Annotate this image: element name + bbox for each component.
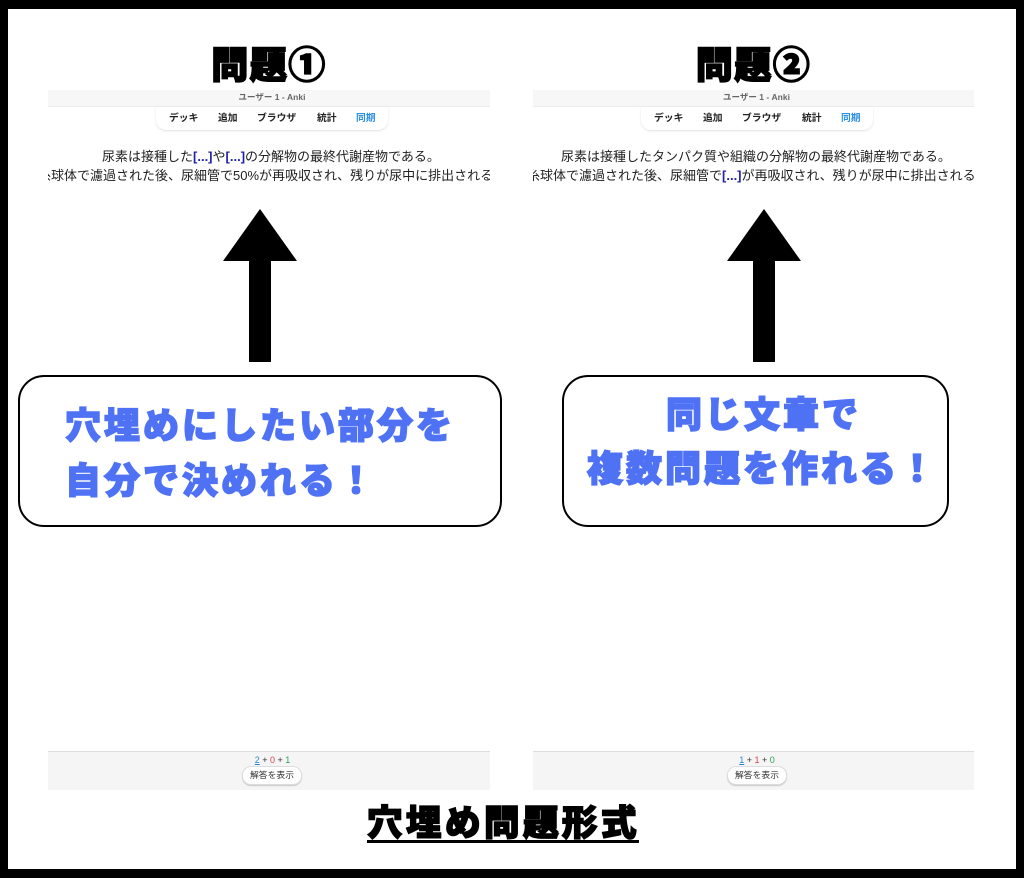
show answer button bbox=[242, 766, 302, 785]
icon: up arrow bbox=[727, 209, 801, 362]
heading: question 1: 問題① bbox=[211, 45, 327, 86]
app navigation menu: 同期 bbox=[841, 113, 861, 124]
app title bar bbox=[533, 90, 974, 107]
app navigation menu: ブラウザ bbox=[257, 113, 296, 124]
callout: choose blanks bbox=[18, 375, 502, 527]
app navigation menu: 同期 bbox=[356, 113, 376, 124]
callout text line 2: 自分で決めれる！ bbox=[65, 460, 377, 501]
panel: question 1 bbox=[18, 45, 502, 790]
show answer button bbox=[727, 766, 787, 785]
app navigation menu: 統計 bbox=[802, 113, 822, 124]
card counts: 1 + 1 + 0 bbox=[739, 755, 775, 765]
callout text line 1: 穴埋めにしたい部分を bbox=[65, 405, 455, 446]
panel: question 2 bbox=[533, 45, 974, 790]
app navigation menu: デッキ bbox=[654, 113, 683, 124]
app navigation menu: 追加 bbox=[218, 113, 238, 124]
app title bar bbox=[48, 90, 490, 107]
card text line 1: 尿素は接種したタンパク質や組織の分解物の最終代謝産物である。 bbox=[561, 149, 951, 164]
app navigation menu bbox=[156, 107, 388, 130]
app navigation menu bbox=[641, 107, 873, 130]
bottom title: 穴埋め問題形式 bbox=[367, 803, 640, 843]
app navigation menu: デッキ bbox=[169, 113, 198, 124]
card counts: 2 + 0 + 1 bbox=[255, 755, 290, 765]
show answer button: 解答を表示 bbox=[735, 770, 779, 780]
app footer with answer button bbox=[533, 751, 974, 790]
app title bar: ユーザー 1 - Anki bbox=[239, 92, 305, 102]
callout: multiple questions bbox=[562, 375, 949, 527]
show answer button: 解答を表示 bbox=[250, 770, 294, 780]
app footer with answer button bbox=[48, 751, 490, 790]
app title bar: ユーザー 1 - Anki bbox=[723, 92, 790, 102]
icon: up arrow bbox=[223, 209, 297, 362]
heading: question 2: 問題② bbox=[696, 45, 811, 86]
callout text line 2: 複数問題を作れる！ bbox=[587, 448, 938, 489]
app navigation menu: ブラウザ bbox=[742, 113, 781, 124]
app navigation menu: 追加 bbox=[703, 113, 723, 124]
callout text line 1: 同じ文章で bbox=[666, 394, 861, 435]
card text line 1: 尿素は接種した[...]や[...]の分解物の最終代謝産物である。 bbox=[102, 149, 440, 164]
app navigation menu: 統計 bbox=[317, 113, 337, 124]
